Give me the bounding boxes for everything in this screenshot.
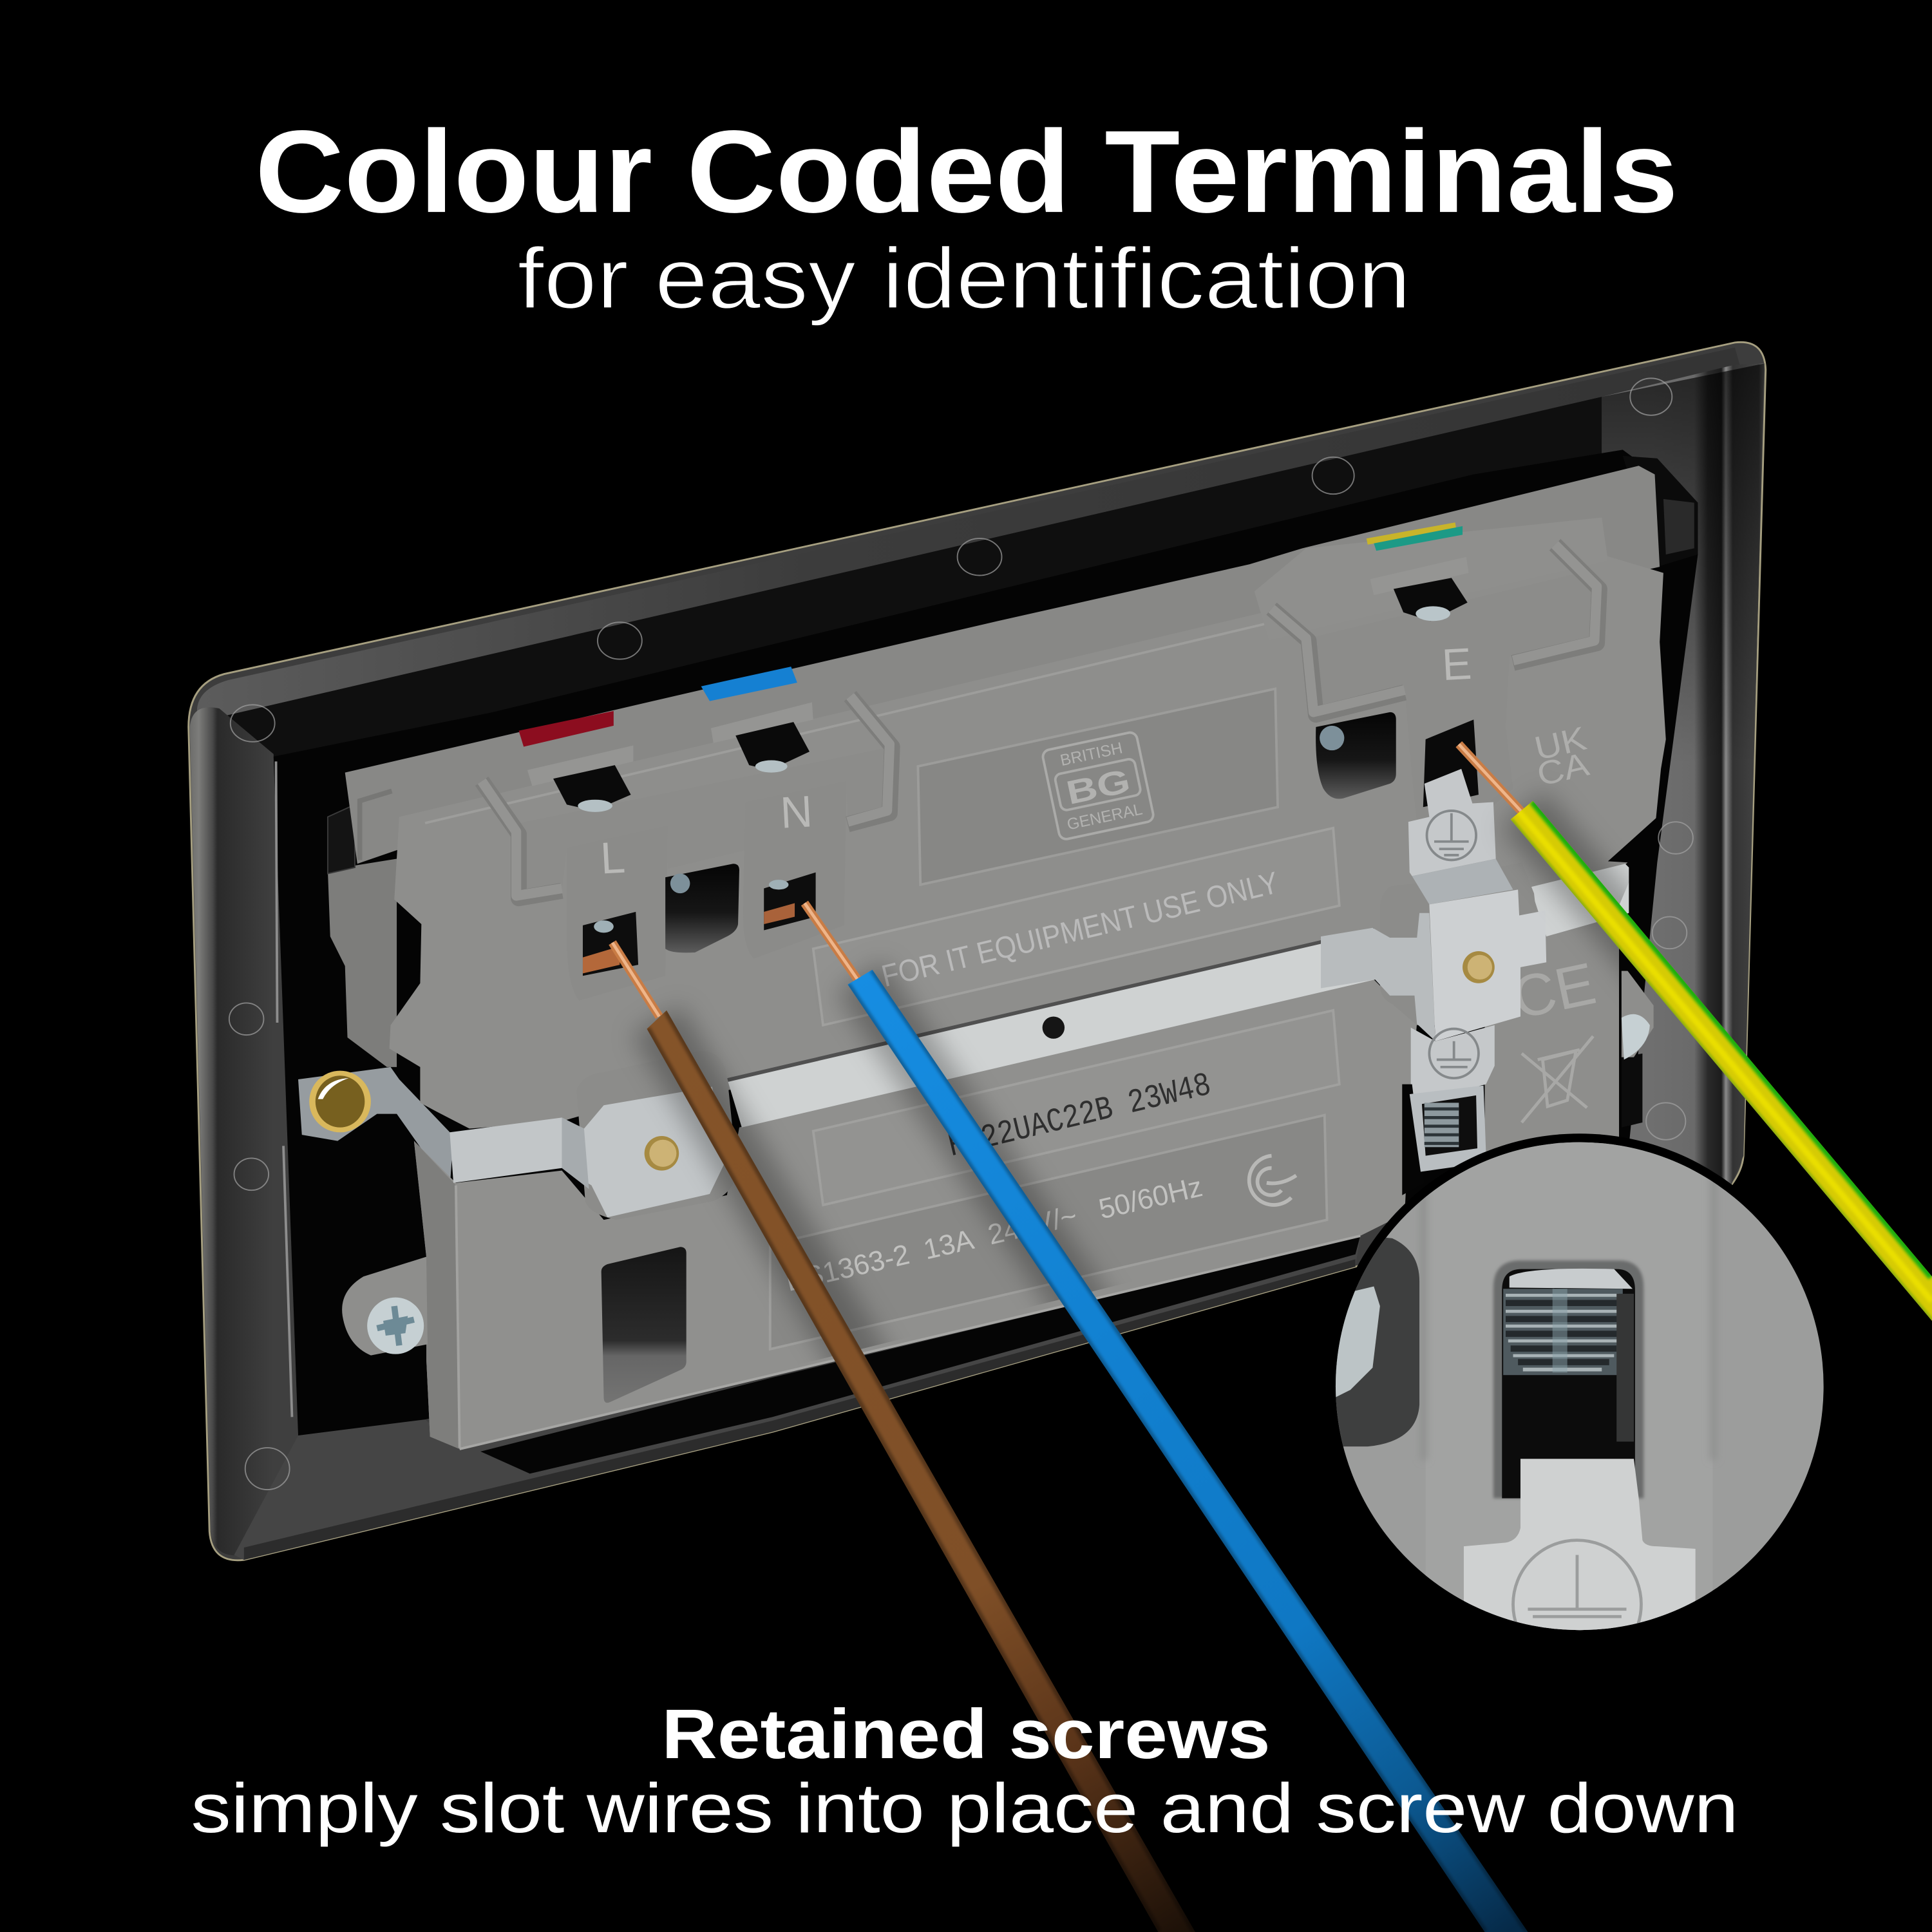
left clip tab — [328, 804, 355, 874]
copper conductors — [612, 744, 1523, 1016]
far right screw — [1622, 971, 1654, 1128]
letter L: L — [599, 833, 627, 883]
left screw bay — [1336, 1238, 1419, 1446]
mark: CE: C — [1507, 958, 1562, 1032]
socket back body — [328, 456, 1698, 1449]
terminal housing: L and N — [482, 667, 892, 1001]
logo: BG British General: GENERAL — [1065, 800, 1144, 834]
title: Colour Coded Terminals — [255, 106, 1678, 237]
stem N — [743, 781, 846, 959]
terminal hole E — [1423, 719, 1479, 807]
stem L — [567, 826, 668, 1001]
black gap under body — [480, 1236, 1360, 1473]
strap hole — [1043, 1016, 1065, 1039]
fixing dimples — [229, 378, 1693, 1490]
upper block — [390, 554, 1666, 1129]
right lower block — [1484, 905, 1619, 1183]
lower block side — [414, 1141, 460, 1449]
cap E — [1370, 557, 1469, 595]
mark: CE — [1507, 951, 1601, 1032]
long strap — [727, 928, 1375, 1128]
terminal hole L — [583, 912, 638, 976]
post N — [848, 696, 892, 824]
terminal box and screw thread — [1402, 1084, 1486, 1195]
post left — [1271, 609, 1405, 715]
mark: UKCA: UK — [1531, 719, 1590, 767]
rectangular opening in lower block — [601, 1247, 687, 1403]
rivet left — [645, 1136, 679, 1171]
mark: UKCA — [1531, 719, 1593, 793]
label: batch code: H922UAC22B 23W48 — [945, 1066, 1215, 1166]
tub highlights — [276, 761, 292, 1417]
bevel lines — [425, 618, 1287, 823]
raised panel: batch code — [813, 1010, 1340, 1205]
rivet right — [1463, 951, 1495, 983]
top lip — [345, 466, 1660, 864]
recessed panel: rating — [770, 1115, 1327, 1349]
clip left — [450, 1087, 727, 1217]
post L — [482, 781, 562, 898]
letter N: N — [779, 786, 813, 838]
letter E: E — [1441, 639, 1473, 690]
terminal hole N — [764, 873, 816, 931]
hook — [360, 791, 392, 860]
recessed tub — [274, 450, 1698, 1435]
caption text: simply slot wires into place and screw down — [191, 1769, 1739, 1848]
strap connecting to clip — [1321, 913, 1435, 1041]
post right — [1513, 545, 1599, 663]
screw access E — [1316, 712, 1396, 799]
mark: UKCA: CA — [1533, 745, 1593, 793]
icon: WEEE bin — [1522, 1036, 1593, 1122]
earth tab — [1464, 1459, 1696, 1631]
terminal opening — [1493, 1260, 1643, 1499]
retained screw thread — [1503, 1289, 1623, 1375]
fixing screw lug — [342, 1257, 428, 1356]
wire shadows — [630, 790, 1629, 1360]
label strip: earth yellow — [1367, 522, 1456, 545]
label strip: neutral blue — [701, 667, 797, 701]
label: for IT equipment use only: FOR IT EQUIPMENT USE ONLY — [878, 866, 1282, 994]
earth symbol lower — [1429, 1029, 1479, 1078]
top band — [216, 367, 1735, 788]
wire: neutral blue — [838, 961, 1540, 1932]
lower block face — [414, 980, 1417, 1449]
right black block — [1623, 456, 1698, 567]
label strip: earth green — [1374, 526, 1463, 551]
terminal housing: E — [1255, 518, 1654, 1128]
silver mounting strap — [450, 769, 1629, 1220]
logo: BG British General: BG — [1063, 762, 1133, 811]
screw access L N — [665, 864, 739, 952]
left mounting lug — [298, 1067, 453, 1189]
cap N — [711, 703, 813, 743]
mark: CE: E — [1549, 951, 1601, 1023]
caption heading: Retained screws — [661, 1695, 1271, 1774]
slot N — [735, 722, 810, 770]
cap L — [527, 746, 633, 786]
wire: live brown — [641, 1004, 1201, 1932]
magnified detail circle — [1336, 1133, 1824, 1631]
icon: crescent mark — [1249, 1156, 1296, 1205]
strap right end — [1530, 864, 1629, 936]
earth tab upper — [1408, 769, 1496, 876]
right band — [1602, 363, 1765, 1214]
subtitle: for easy identification — [518, 231, 1411, 327]
lug left — [576, 1051, 737, 1220]
clip plate — [1429, 889, 1546, 1041]
earth symbol upper — [1427, 811, 1476, 860]
side strip — [328, 859, 397, 1067]
fold — [1412, 859, 1513, 904]
logo: BG British General: BRITISH — [1059, 739, 1124, 770]
top rim — [197, 348, 1740, 717]
recessed panel: logo — [918, 689, 1278, 885]
label strip: live red — [518, 711, 614, 746]
bottom band — [234, 1236, 1360, 1560]
bar — [514, 746, 892, 898]
logo: BG British General — [1041, 731, 1155, 840]
raised panel: for IT equipment — [813, 828, 1340, 1025]
earth symbol — [1511, 1539, 1643, 1624]
brass mounting hole — [309, 1071, 371, 1132]
wire: earth green and yellow — [1503, 788, 1932, 1325]
green stripe — [1533, 801, 1932, 1276]
ridge shading — [1426, 1140, 1712, 1638]
left band — [190, 707, 298, 1555]
wall plate — [189, 342, 1766, 1560]
earth tab lower — [1411, 1025, 1495, 1103]
lug right — [1380, 862, 1540, 1025]
slot E — [1394, 578, 1468, 621]
slot L — [553, 765, 631, 811]
label: rating: BS1363-2 13A 240V/~ 50/60Hz — [783, 1171, 1206, 1298]
